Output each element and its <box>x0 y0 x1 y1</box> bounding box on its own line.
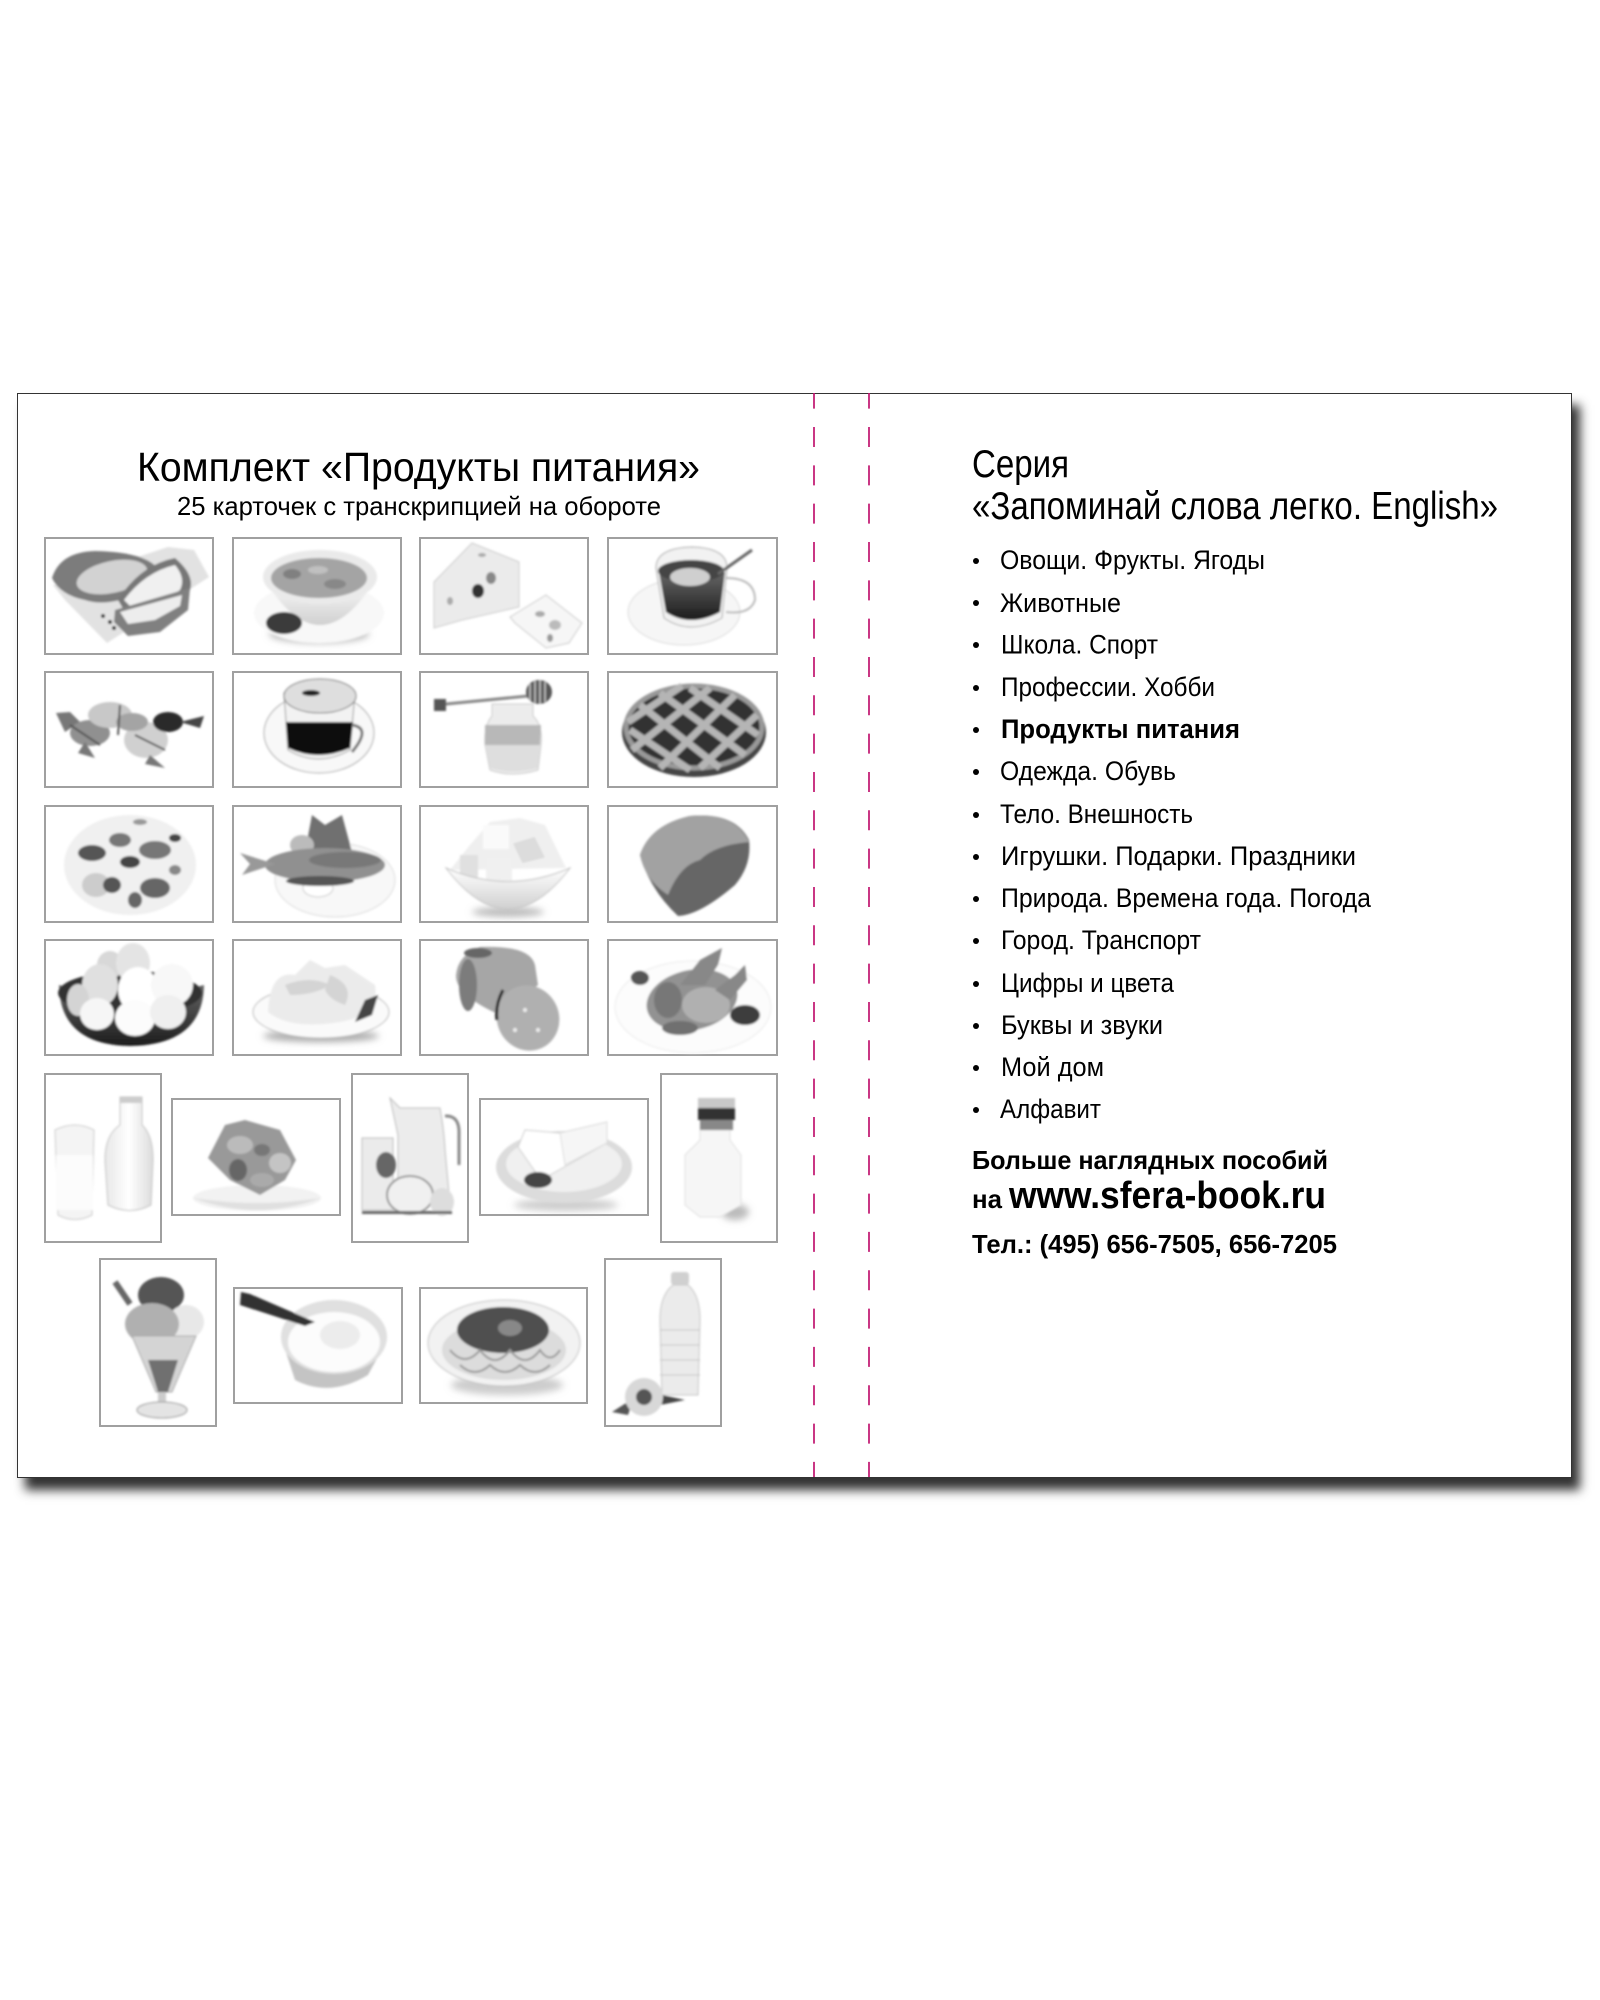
card: sunflower oil <box>605 1259 721 1426</box>
list item: Тело. Внешность <box>1000 799 1193 829</box>
fold line: left dashed <box>813 393 815 1477</box>
image: bowl of sour cream with spoon <box>240 1292 387 1388</box>
list item: Животные <box>1000 588 1121 618</box>
card: ice cream <box>100 1259 216 1426</box>
card: sausage <box>420 940 588 1061</box>
image: loaf of rye bread <box>640 816 749 916</box>
image: glass mug of coffee on saucer <box>264 679 374 773</box>
image: bowl of sugar cubes <box>446 818 570 917</box>
image: meat on board <box>52 547 209 643</box>
subtitle: 25 карточек с транскрипцией на обороте <box>177 491 661 521</box>
image: mashed potatoes on plate <box>253 960 389 1042</box>
card: fish <box>233 806 401 922</box>
card: meat <box>45 538 213 654</box>
list item: Город. Транспорт <box>1001 925 1201 955</box>
card: honey <box>420 672 588 787</box>
image: wrapped candies <box>56 702 204 768</box>
image: soup bowl on plate <box>254 550 384 643</box>
image: glass cup of tea with lemon <box>628 547 755 645</box>
card: sugar <box>420 806 588 922</box>
title: Комплект «Продукты питания» <box>137 444 700 490</box>
image: salt shaker <box>685 1098 749 1220</box>
callout: more materials and website <box>972 1145 1328 1217</box>
card: pie <box>608 672 777 787</box>
callout: more materials and website: Больше наглядных пособий <box>972 1145 1328 1175</box>
list item: Мой дом <box>1001 1052 1104 1082</box>
card: milk <box>45 1074 161 1242</box>
list item, bold: Продукты питания <box>1001 714 1240 744</box>
image: lattice pie <box>622 686 766 777</box>
contact phone numbers: Тел.: (495) 656-7505, 656-7205 <box>972 1229 1337 1259</box>
callout: more materials and website: на <box>972 1184 1003 1214</box>
image: white cheese on plate <box>496 1122 632 1211</box>
list item: Природа. Времена года. Погода <box>1001 883 1372 913</box>
list item: Игрушки. Подарки. Праздники <box>1001 841 1356 871</box>
card: salt <box>661 1074 777 1242</box>
card: mashed potatoes <box>233 940 401 1055</box>
card: roast chicken <box>608 940 777 1055</box>
card: coffee <box>233 672 401 787</box>
list item: Школа. Спорт <box>1001 630 1158 660</box>
image: sliced sausage <box>456 947 570 1061</box>
list item: Одежда. Обувь <box>1000 756 1176 786</box>
card: sour cream <box>234 1288 402 1403</box>
image: cheese wedge and slice <box>434 543 582 648</box>
image: spaghetti with sauce <box>428 1300 580 1395</box>
card: candies <box>45 672 213 787</box>
image: ice cream sundae <box>115 1277 204 1418</box>
image: salad on plate <box>193 1120 321 1211</box>
list item: Алфавит <box>1000 1094 1101 1124</box>
image: bowl of eggs <box>58 943 204 1046</box>
card: soup <box>233 538 401 654</box>
heading: series <box>972 443 1498 528</box>
callout: more materials and website: www.sfera-book.ru <box>1008 1175 1326 1217</box>
heading: series: «Запоминай слова легко. English» <box>972 485 1498 528</box>
fold line: right dashed <box>868 393 870 1477</box>
image: roast chicken with parsley <box>615 948 771 1053</box>
image: mushroom pizza <box>64 815 196 915</box>
card: salad <box>172 1099 340 1215</box>
list item: Профессии. Хобби <box>1001 672 1215 702</box>
list: series titles <box>973 545 1372 1124</box>
image: glass and bottle of milk <box>55 1097 153 1220</box>
card: spaghetti <box>420 1288 587 1403</box>
list item: Овощи. Фрукты. Ягоды <box>1000 545 1265 575</box>
image: oil bottle with sunflower <box>612 1272 700 1416</box>
card: eggs <box>45 940 213 1055</box>
card: tea <box>608 538 777 654</box>
image: honey jar and dipper <box>434 680 552 774</box>
image: jug, glass and citrus <box>362 1098 459 1216</box>
card: bread <box>608 806 777 922</box>
card: cheese <box>420 538 588 654</box>
image: fish on plate with greens <box>240 815 395 917</box>
list item: Цифры и цвета <box>1001 968 1175 998</box>
card: pizza <box>45 806 213 922</box>
heading: series: Серия <box>972 443 1069 486</box>
panel: brochure sheet with drop shadow <box>17 393 1572 1478</box>
card: juice jug <box>352 1074 468 1242</box>
list item: Буквы и звуки <box>1001 1010 1163 1040</box>
card: feta <box>480 1099 648 1215</box>
